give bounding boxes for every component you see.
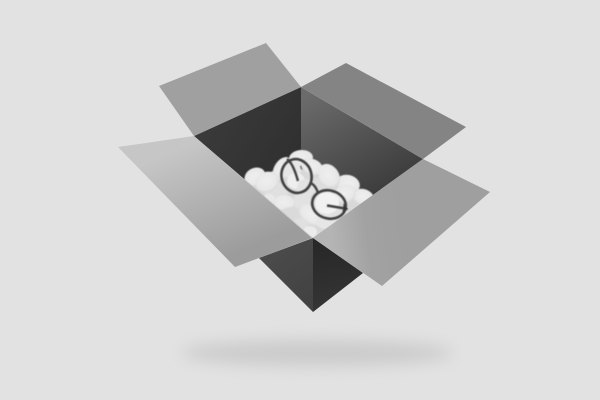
box interior — [194, 87, 423, 242]
packing peanuts — [241, 149, 376, 242]
front-right flap — [313, 159, 490, 286]
left lens frame — [278, 156, 315, 196]
glasses — [278, 156, 349, 222]
right temple arm — [327, 206, 345, 208]
front-left flap — [118, 136, 312, 267]
left temple arm — [287, 159, 298, 181]
bridge — [311, 183, 318, 193]
inner right wall — [301, 87, 423, 240]
inner left wall — [194, 87, 301, 240]
open cardboard box illustration — [118, 43, 490, 369]
floor shadow — [181, 340, 453, 366]
back-left flap — [159, 43, 301, 136]
hinge — [343, 204, 348, 212]
back-right flap — [301, 63, 466, 159]
bottom-right outer face — [313, 238, 363, 312]
right lens frame — [309, 187, 349, 222]
bottom-left outer face — [259, 238, 313, 312]
